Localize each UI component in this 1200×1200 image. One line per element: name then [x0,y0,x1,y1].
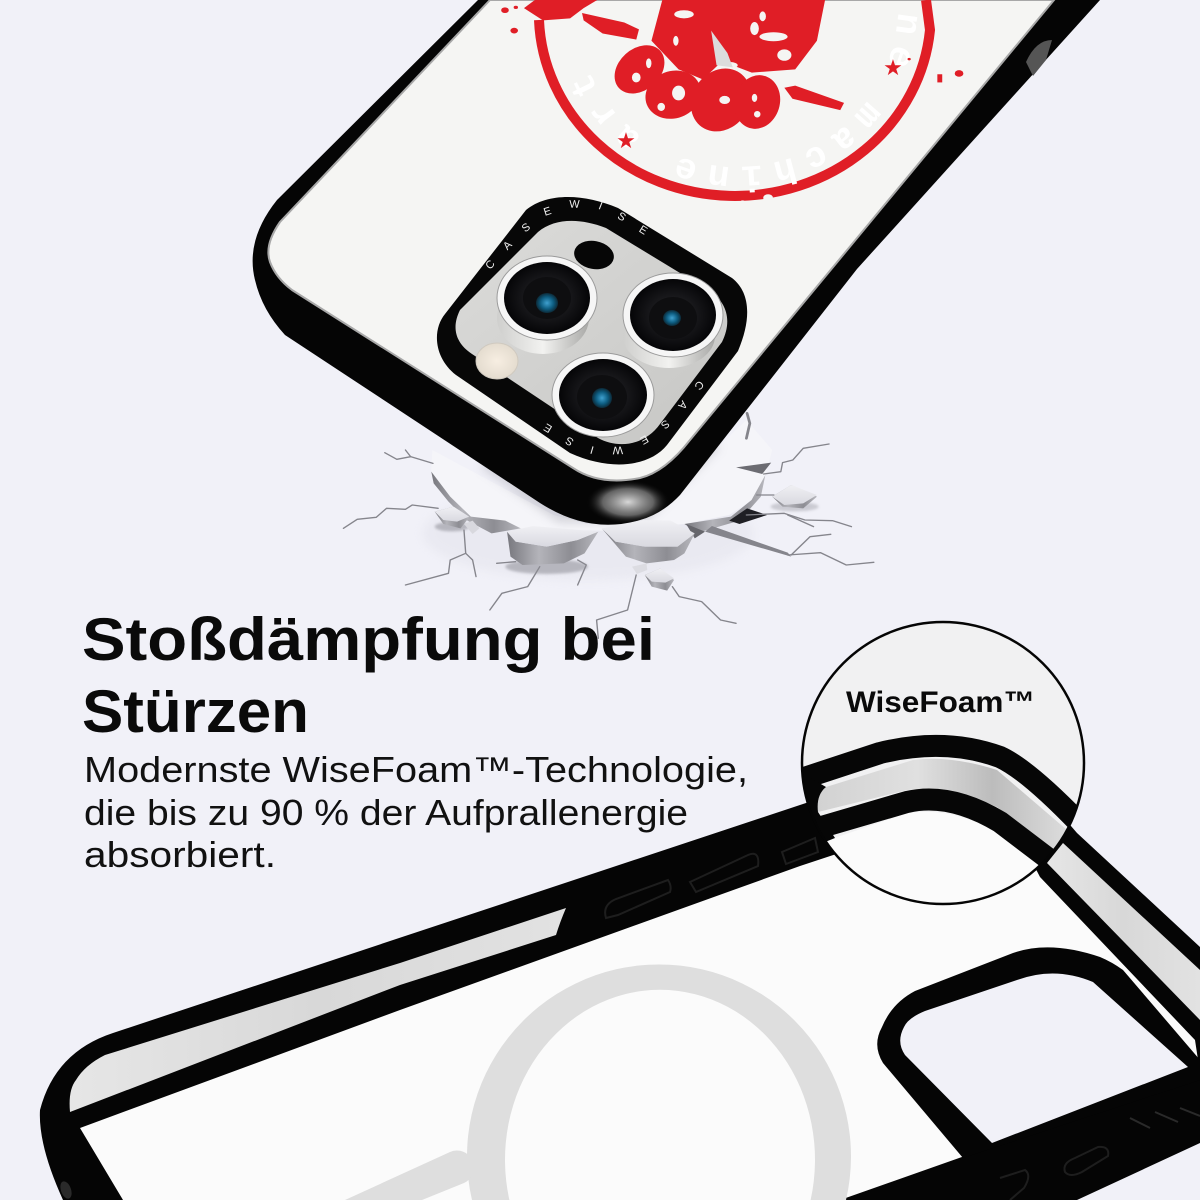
star left: ★ [616,129,636,154]
foam band right [1047,843,1200,1020]
alignment pill [345,1150,474,1200]
side button detail [1026,40,1052,76]
soft shadow under the phone [485,443,715,517]
red stamp graphic [501,0,964,201]
magnified inner area [828,812,1038,902]
heading: Stürzen [82,678,309,745]
crack lines [343,413,874,638]
rock A [507,532,598,565]
lens right [623,273,723,368]
left frame junction [806,784,835,842]
body text: absorbiert. [84,834,276,875]
phone body [253,0,1100,525]
rock shadows [505,559,588,574]
worn spots [632,10,791,118]
flash [476,343,518,379]
stamp ring [539,0,930,196]
phone: back of black-framed case [252,0,1100,525]
highlight at the bottom corner [591,482,665,522]
rock B [602,528,695,563]
lens top left [497,256,597,354]
case: inside view [40,790,1200,1200]
body text: die bis zu 90 % der Aufprallenergie [84,792,688,833]
button cutouts [605,838,1108,1200]
black frame [40,790,1200,1200]
white back panel [268,0,1054,480]
heading [82,606,655,745]
illustration: cracked ground impact [343,413,874,638]
camera plate [456,221,727,444]
callout: WiseFoam magnifier [795,622,1090,906]
magnified inner frame [818,800,1050,860]
body text [84,749,748,875]
camera window opening [900,973,1188,1143]
magnified foam band [818,759,1067,850]
microphone hole [572,238,616,272]
foam band left [70,908,566,1112]
body text: Modernste WiseFoam™-Technologie, [84,749,748,790]
white inner back [80,800,1200,1200]
magnified outer frame [795,746,1080,824]
heading: Stoßdämpfung bei [82,606,655,673]
brand ring text lower: CASEWISE [543,382,704,454]
frame texture [1130,1108,1200,1128]
star right: ★ [883,56,903,81]
splatter [510,28,518,33]
label: WiseFoam™ [846,686,1035,719]
speaker hole [58,1180,74,1200]
small rocks [435,507,469,528]
lens bottom [552,353,654,437]
stamp lettering: ne machine art [572,14,917,192]
fist [501,0,963,204]
camera island [436,197,748,464]
brand ring text: CASEWISE [486,200,648,268]
camera window frame [877,947,1200,1158]
MagSafe ring [467,964,851,1200]
